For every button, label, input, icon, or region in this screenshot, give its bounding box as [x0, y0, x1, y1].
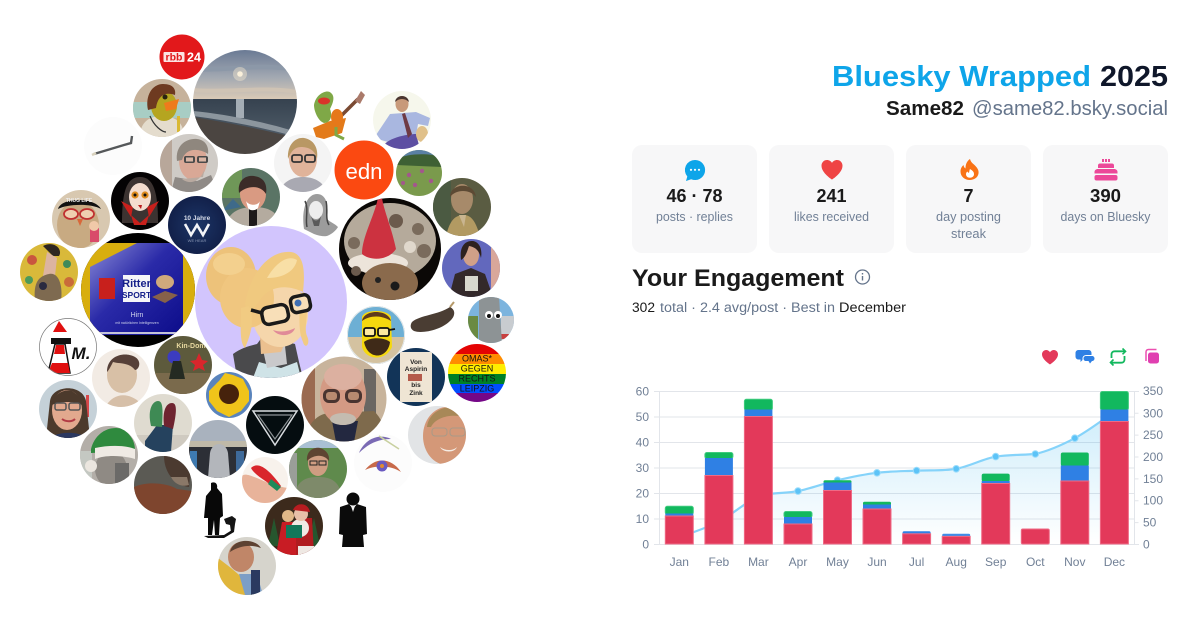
panel: stat card posts and replies — [632, 145, 757, 253]
engagement summary text: 302 — [632, 300, 655, 315]
avatar: rbb24 logo — [159, 34, 205, 80]
avatar: Ritter Sport Hirn: SPORT — [122, 290, 152, 300]
left axis labels — [636, 384, 649, 552]
avatar: yellow bearded cartoon — [347, 306, 405, 364]
month labels: Jul — [909, 555, 924, 569]
panel: stat card days on Bluesky — [1043, 145, 1168, 253]
bars: February — [705, 452, 733, 544]
panel: stat card streak — [906, 145, 1031, 253]
left axis labels: 0 — [642, 538, 649, 552]
right axis labels: 200 — [1143, 450, 1163, 464]
cumulative points — [795, 435, 1078, 494]
avatar: Omas gegen Rechts Leipzig: LEIPZIG — [460, 384, 494, 394]
avatar: meadow — [396, 150, 442, 196]
icon: heart — [822, 160, 842, 180]
month labels: Mar — [748, 555, 769, 569]
right axis labels: 0 — [1143, 538, 1150, 552]
left axis labels: 20 — [636, 486, 649, 500]
panel: avatar bubble cluster — [20, 34, 514, 595]
month labels: Dec — [1104, 555, 1125, 569]
engagement summary text — [632, 300, 907, 315]
right axis labels — [1143, 384, 1163, 552]
avatar: frog with guitar — [309, 84, 367, 142]
right axis labels: 50 — [1143, 516, 1157, 530]
bars: September — [982, 474, 1010, 544]
avatar: man in black suit silhouette — [324, 491, 382, 549]
avatar: 10 Jahre W: 10 Jahre — [184, 215, 211, 222]
avatar: book Von Aspirin bis Zink — [387, 348, 445, 406]
bars: August — [942, 534, 970, 544]
icon: flame — [960, 159, 979, 180]
panel: stat card days on Bluesky: 390 — [1090, 186, 1121, 206]
avatar: sea at sunset — [193, 50, 297, 154]
title: Bluesky Wrapped 2025: 2025 — [1100, 61, 1168, 93]
avatar: man in yellow raincoat — [218, 537, 276, 595]
avatar: santa and woman — [265, 497, 323, 555]
avatar: Omas gegen Rechts Leipzig: RECHTS — [458, 374, 496, 384]
icon: chat bubble — [685, 160, 705, 181]
bars: November — [1061, 452, 1089, 544]
user name and handle: @same82.bsky.social — [972, 98, 1168, 120]
bars: June — [863, 502, 891, 544]
avatar: blond man portrait — [274, 134, 332, 192]
avatar: smiling man — [222, 168, 280, 226]
right axis labels: 150 — [1143, 472, 1163, 486]
avatar: googly eyes pole — [468, 297, 514, 343]
month labels: Jan — [670, 555, 689, 569]
title: Bluesky Wrapped 2025: Bluesky Wrapped — [832, 61, 1091, 93]
panel: stat card likes — [769, 145, 894, 253]
bars: May — [824, 480, 852, 544]
avatar: Ritter Sport Hirn: mit natürlichen Intelligenzen — [115, 321, 159, 325]
avatar: vampire girl — [111, 172, 169, 230]
avatar: 10 Jahre W — [168, 196, 226, 254]
panel: stat card days on Bluesky: days on Bluesky — [1060, 210, 1151, 224]
avatar: sepia woman — [92, 349, 150, 407]
cumulative line — [679, 412, 1114, 537]
panel: stat card posts and replies: posts · replies — [656, 210, 733, 224]
cumulative area — [679, 412, 1114, 544]
month labels: Apr — [789, 555, 807, 569]
avatar: rbb24 logo: 24 — [187, 50, 201, 64]
icon: legend replies — [1076, 350, 1094, 364]
avatar: Omas gegen Rechts Leipzig: OMAS* — [462, 354, 492, 364]
avatar: tool on white — [84, 117, 142, 175]
bars: January — [665, 506, 693, 544]
avatar: silhouette with dog — [189, 481, 247, 539]
avatar: band poster: Kin-Dom — [176, 343, 206, 350]
avatar: green santa hat — [80, 426, 138, 487]
month labels: Jun — [867, 555, 887, 569]
avatar: owl thug life: THUG LIFE — [66, 198, 93, 204]
month labels: Nov — [1064, 555, 1085, 569]
avatar: Omas gegen Rechts Leipzig: GEGEN — [461, 364, 493, 374]
avatar: man with glasses grey — [160, 134, 218, 192]
avatar: woman on blue wall — [442, 239, 500, 297]
avatar: Omas gegen Rechts Leipzig — [448, 344, 506, 403]
avatar: book Von Aspirin bis Zink: Von — [410, 359, 422, 366]
icon: legend heart likes — [1042, 350, 1058, 364]
avatar: Ritter Sport Hirn — [81, 233, 195, 347]
avatar: brown sweater — [134, 456, 192, 514]
avatar: curly hair sketch — [303, 194, 338, 236]
avatar: bald man with glasses — [301, 356, 387, 442]
right axis labels: 250 — [1143, 428, 1163, 442]
month labels: Oct — [1026, 555, 1045, 569]
month labels: Aug — [946, 555, 967, 569]
avatar: rbb24 logo: rbb — [166, 52, 182, 64]
right axis labels: 350 — [1143, 384, 1163, 398]
avatar: woman with glasses — [39, 380, 97, 438]
left axis labels: 10 — [636, 512, 649, 526]
avatar: book Von Aspirin bis Zink: Aspirin — [405, 366, 427, 373]
panel: stat card likes: 241 — [816, 186, 846, 206]
avatar: sneakers on table — [134, 394, 192, 452]
right axis labels: 100 — [1143, 494, 1163, 508]
heading: Your Engagement: Your Engagement — [632, 265, 844, 292]
avatar: edn logo — [334, 140, 394, 200]
avatar: lighthouse — [39, 318, 97, 376]
left axis labels: 50 — [636, 410, 649, 424]
avatar: band poster — [154, 336, 212, 394]
month labels: Feb — [709, 555, 730, 569]
avatar: smiling man close up — [408, 406, 471, 465]
left axis labels: 60 — [636, 384, 649, 398]
month labels: Sep — [985, 555, 1007, 569]
avatar: painted eye — [354, 434, 412, 492]
bars: October — [1021, 529, 1049, 544]
panel: stat card streak: 7 — [964, 186, 974, 206]
chart: monthly engagement stacked bars with cumulative line — [636, 384, 1163, 569]
avatar: man in tie — [373, 91, 431, 149]
avatar: book Von Aspirin bis Zink: bis — [411, 382, 421, 389]
right axis labels: 300 — [1143, 406, 1163, 420]
chart legend icons — [1042, 348, 1159, 366]
avatar: Ritter Sport Hirn: Hirn — [131, 312, 144, 319]
panel: stat card likes: likes received — [794, 210, 869, 224]
avatar: rubber duck doctor — [133, 79, 191, 137]
avatar: hedgehog with santa hat — [339, 198, 441, 303]
engagement summary text: total · 2.4 avg/post · Best in — [660, 300, 835, 315]
y axis grid lines — [654, 391, 1139, 545]
avatar: Ritter Sport Hirn: Ritter — [122, 278, 152, 290]
avatar: crowd at protest — [189, 420, 247, 478]
panel: stat card streak: streak — [951, 227, 987, 241]
avatar: brown bean object — [411, 302, 454, 332]
icon: legend reposts — [1110, 348, 1126, 366]
engagement summary text: December — [839, 300, 907, 315]
panel: stat card streak: day posting — [936, 210, 1001, 224]
avatar: book Von Aspirin bis Zink: Zink — [409, 390, 423, 397]
avatar: edn logo: edn — [346, 159, 382, 184]
avatar: lighthouse: M. — [72, 344, 90, 363]
avatar: red pen in hand — [242, 457, 288, 503]
avatar: owl thug life — [52, 190, 110, 249]
bars: March — [744, 399, 772, 544]
bars: December — [1100, 392, 1128, 544]
icon: legend quotes — [1146, 350, 1159, 364]
avatar: portrait painting — [433, 178, 491, 236]
month labels — [670, 555, 1125, 569]
bars: July — [903, 531, 931, 544]
month labels: May — [826, 555, 849, 569]
icon: birthday cake — [1094, 159, 1118, 180]
left axis labels: 40 — [636, 436, 649, 450]
bars: April — [784, 512, 812, 544]
avatar: blonde 3D character, main user — [195, 226, 347, 378]
avatar: Klimt painting — [20, 243, 78, 301]
avatar: inverted triangles — [246, 396, 304, 454]
user name and handle: Same82 — [886, 98, 964, 120]
avatar: 10 Jahre W: WE HEAR — [188, 238, 206, 243]
avatar: sunflower — [206, 372, 252, 418]
avatar: man in green shirt — [289, 440, 347, 498]
left axis labels: 30 — [636, 461, 649, 475]
icon: info — [856, 270, 870, 284]
panel: stat card posts and replies: 46 · 78 — [666, 186, 722, 206]
user name and handle — [886, 98, 1168, 120]
